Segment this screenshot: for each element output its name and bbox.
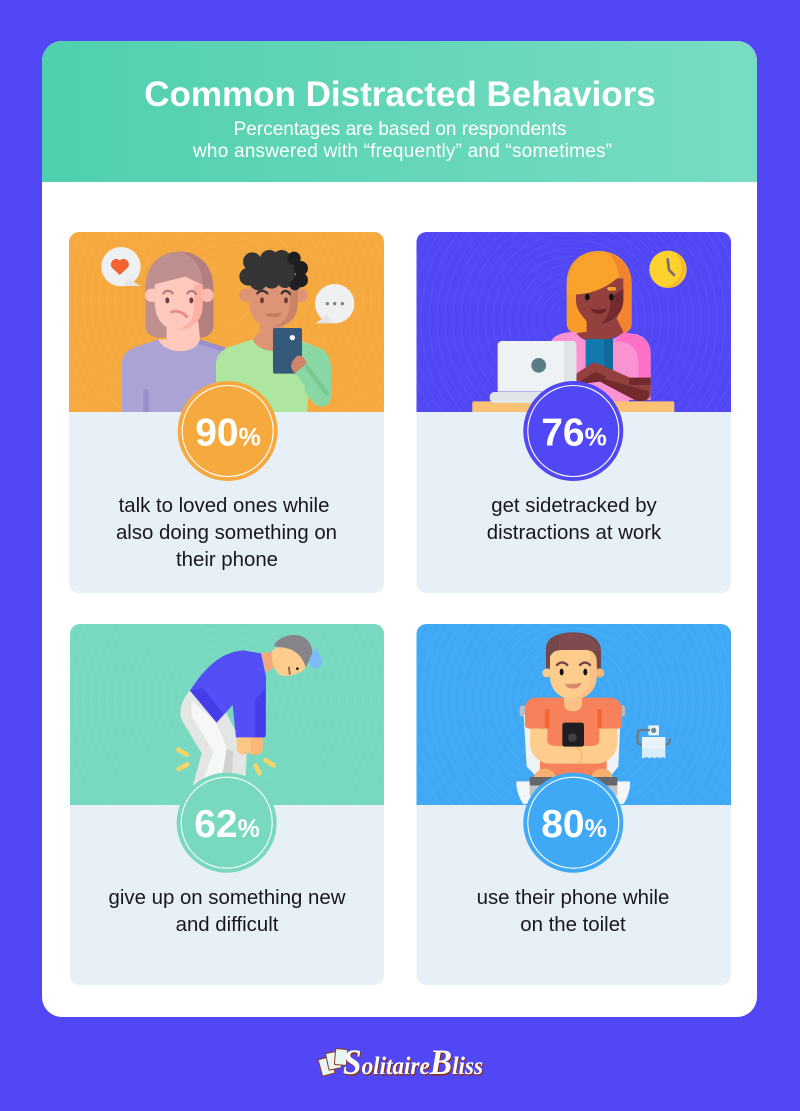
illustration: tired man bending over <box>70 624 384 805</box>
neck <box>564 698 582 712</box>
logo wordmark: SolitaireBliss <box>343 1042 483 1082</box>
caption: and difficult <box>176 914 279 936</box>
subtitle: who answered with “frequently” and “sometimes” <box>192 141 612 162</box>
badge: 80%: 80% <box>541 803 607 846</box>
logo: Solitaire Bliss <box>318 1042 484 1084</box>
panel: phone on toilet <box>416 624 731 985</box>
subtitle: Percentages are based on respondents <box>234 119 566 140</box>
woman <box>122 252 226 414</box>
jumper <box>190 650 266 737</box>
icon: typing bubble <box>315 284 354 323</box>
icon: clock <box>649 251 687 288</box>
title: Common Distracted Behaviors <box>144 75 656 114</box>
illustration: man on toilet <box>416 624 731 805</box>
trousers <box>180 691 247 790</box>
illustration: couple with phone <box>69 232 384 412</box>
logo wordmark: SolitaireBliss <box>344 1044 484 1084</box>
top <box>552 332 651 402</box>
icon: heart bubble <box>101 247 141 286</box>
caption: also doing something on <box>116 522 337 544</box>
caption: give up on something new <box>109 887 346 909</box>
caption <box>116 495 337 571</box>
badge: 90% <box>178 381 278 481</box>
illustration: woman with laptop <box>416 232 731 412</box>
arm and hand <box>302 370 323 399</box>
icon: cards <box>318 1049 348 1076</box>
head <box>272 635 312 676</box>
badge: 62%: 62% <box>194 803 260 846</box>
caption: on the toilet <box>520 914 626 936</box>
panel: talk to loved ones <box>69 232 384 593</box>
desk <box>472 401 674 412</box>
shirt <box>525 698 622 777</box>
laptop <box>490 341 576 403</box>
arms <box>576 362 651 401</box>
man <box>216 250 331 412</box>
panel: give up on something <box>70 624 384 985</box>
head <box>542 632 604 699</box>
badge: 90%: 90% <box>195 412 261 454</box>
phone <box>562 723 584 747</box>
caption <box>109 887 346 936</box>
panel: sidetracked at work <box>416 232 731 593</box>
pain marks <box>178 750 274 773</box>
badge: 80% <box>523 773 623 873</box>
badge: 76%: 76% <box>541 412 607 454</box>
caption: their phone <box>176 549 278 571</box>
header band <box>42 41 757 182</box>
caption <box>487 495 662 544</box>
icon: toilet paper <box>638 725 670 758</box>
badge: 76% <box>523 381 623 481</box>
caption: get sidetracked by <box>491 495 658 517</box>
woman <box>552 251 651 402</box>
phone <box>273 328 302 374</box>
neck <box>261 652 275 673</box>
badge: 62% <box>177 773 277 873</box>
legs <box>534 769 556 777</box>
toilet <box>516 706 630 804</box>
caption: distractions at work <box>487 522 662 544</box>
arms <box>530 729 581 764</box>
hair <box>239 250 295 290</box>
subtitle <box>192 119 612 162</box>
hands <box>237 735 263 755</box>
icon: sweat drop <box>309 647 322 668</box>
phone <box>586 339 604 368</box>
main panel <box>42 41 757 1017</box>
caption: talk to loved ones while <box>119 495 329 517</box>
caption <box>477 887 669 936</box>
caption: use their phone while <box>477 887 669 909</box>
hair fringe <box>567 251 619 294</box>
